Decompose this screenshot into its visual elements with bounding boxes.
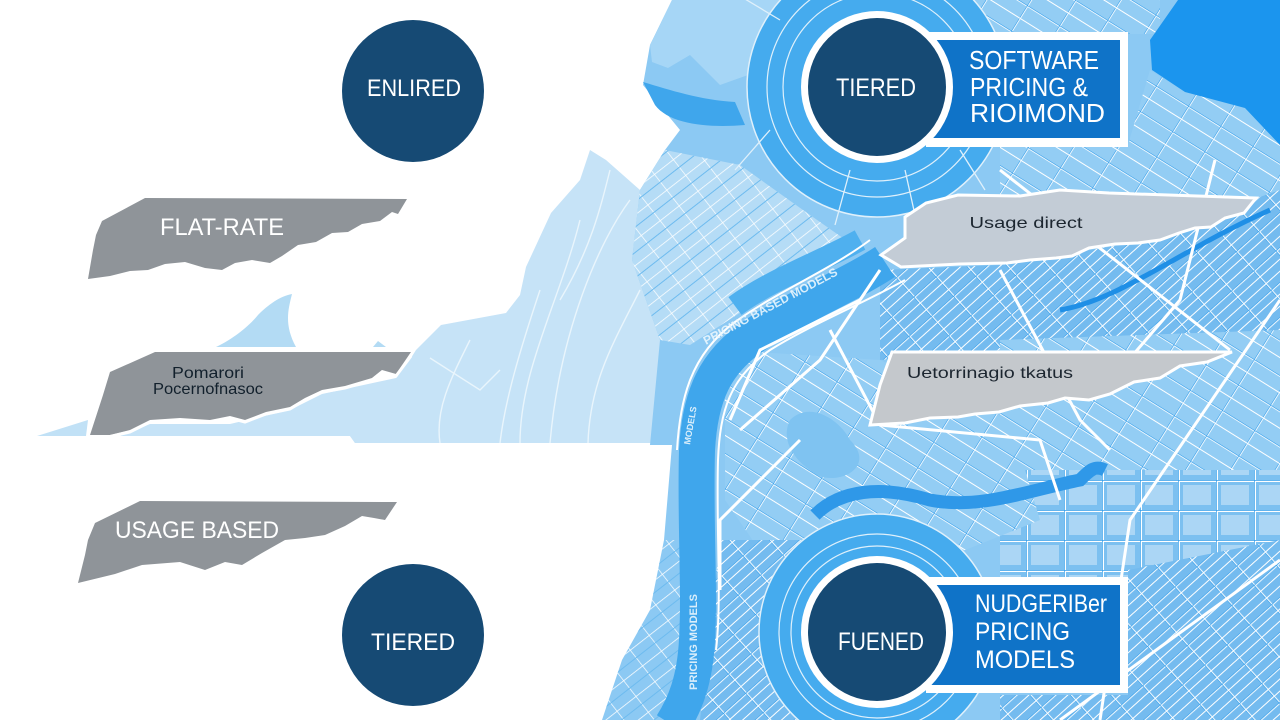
label: pomarori <box>90 352 411 437</box>
map water: upper river shoulder <box>735 240 860 306</box>
map street grid: north blocks <box>940 0 1160 34</box>
map lake <box>787 412 859 478</box>
label: usage based: USAGE BASED <box>115 517 279 544</box>
map land: pale western area <box>350 150 700 443</box>
map illustration <box>350 0 1280 720</box>
map district: diagonal parcels <box>632 150 860 345</box>
map water: river <box>672 262 885 720</box>
map ring: northern rings <box>730 0 1007 225</box>
map river labels <box>682 265 840 690</box>
map street grid: centre blocks <box>880 190 1280 360</box>
label: flat-rate <box>88 198 407 279</box>
western map sliver <box>37 420 88 436</box>
map western contour lines <box>430 170 640 443</box>
callout: tiered circle: TIERED <box>371 629 455 656</box>
callout: enlired circle <box>342 20 484 162</box>
small map islet <box>373 341 386 347</box>
map water: river banks <box>677 240 905 650</box>
map district: parcel street grid <box>632 150 860 345</box>
label: flat-rate: FLAT-RATE <box>160 214 284 241</box>
callout: tiered ringed circle <box>801 11 953 163</box>
map river labels: PRICING BASED MODELS <box>701 265 840 348</box>
map water: north-east bay <box>1150 0 1280 145</box>
map street grid: far south-east diagonal blocks <box>1000 540 1280 720</box>
label: usage direct <box>881 190 1256 267</box>
map street grid: east blocks <box>1000 330 1280 480</box>
western fin of map <box>216 294 296 347</box>
map river labels: PRICING MODELS <box>688 594 700 690</box>
callout: tiered ringed circle: TIERED <box>836 74 916 102</box>
map strip under second label <box>120 358 420 443</box>
label: pomarori: Pomarori <box>172 365 244 382</box>
map water: north-west inlet <box>643 82 745 126</box>
label: metering status <box>870 352 1232 425</box>
map river labels: MODELS <box>682 406 699 445</box>
map land: mid-blue eastern area <box>602 0 1280 720</box>
callout: software pricing panel: PRICING & <box>970 72 1088 102</box>
callout: enlired circle: ENLIRED <box>367 75 461 102</box>
map land: south-west hatch <box>602 540 690 720</box>
callout: pricing models panel: NUDGERIBer <box>975 590 1107 618</box>
map street grid: south-east blocks <box>1000 470 1280 580</box>
map ring: southern rings <box>759 514 995 720</box>
callout: software pricing panel: RIOIMOND <box>970 98 1105 128</box>
callout: pricing models panel: PRICING <box>975 618 1070 646</box>
map water: central stream <box>815 468 1105 515</box>
map land: north-west headland <box>650 0 790 85</box>
map main roads <box>720 160 1280 720</box>
callout: software pricing panel: SOFTWARE <box>969 45 1099 75</box>
callout: software pricing panel <box>926 32 1128 147</box>
map water: eastern stream <box>1060 210 1270 310</box>
callout: fuened ringed circle: FUENED <box>838 628 924 656</box>
callout: tiered circle <box>342 564 484 706</box>
label: usage based <box>78 501 397 583</box>
callout: fuened ringed circle <box>801 556 953 708</box>
label: usage direct: Usage direct <box>970 215 1083 232</box>
label: pomarori: Pocernofnasoc <box>153 381 263 398</box>
callout: pricing models panel: MODELS <box>975 646 1075 674</box>
map street grid: south-centre blocks <box>725 350 1040 580</box>
callout: pricing models panel <box>926 577 1128 693</box>
map street grid: lower west blocks <box>700 540 810 720</box>
label: metering status: Uetorrinagio tkatus <box>907 365 1073 382</box>
map street grid: north-east blocks <box>1000 70 1280 300</box>
